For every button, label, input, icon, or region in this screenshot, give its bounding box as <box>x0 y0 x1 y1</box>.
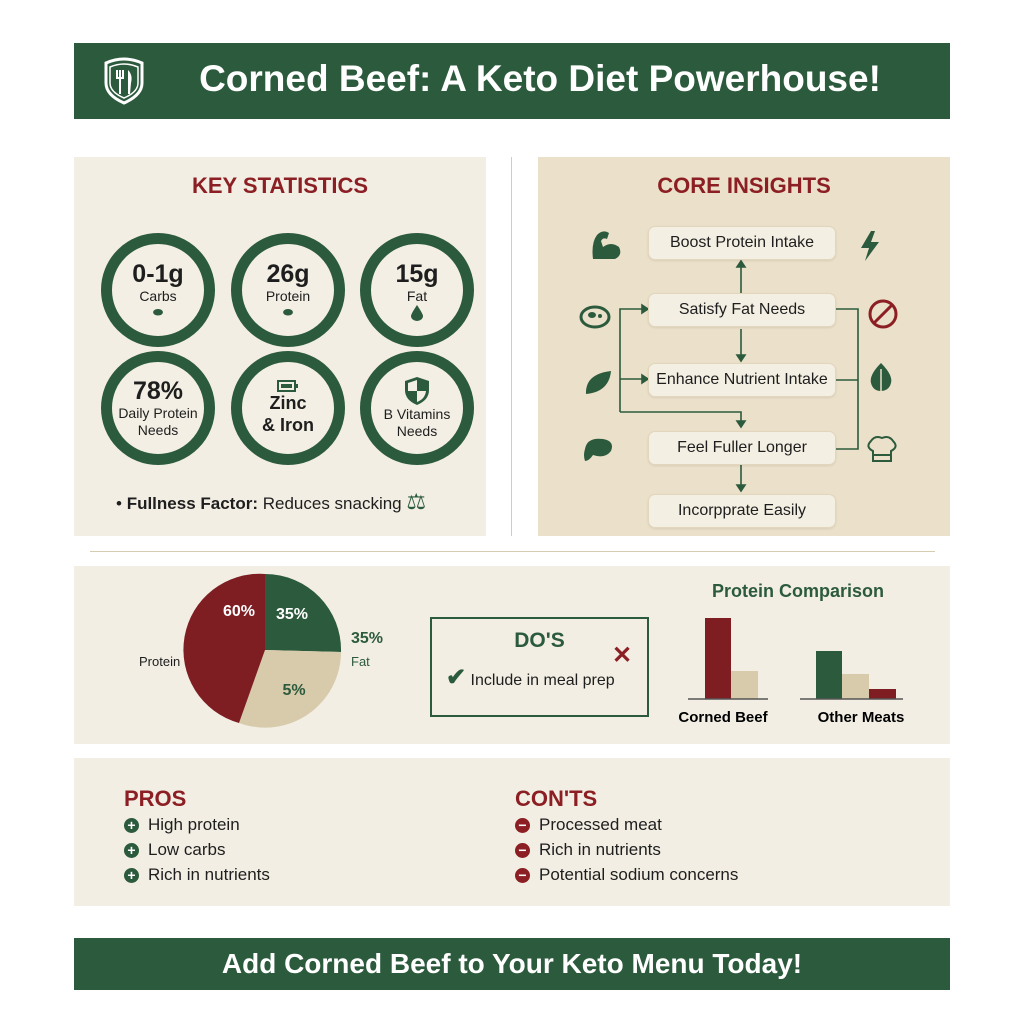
stat: daily protein: 78% <box>133 377 183 405</box>
cons list: − <box>518 842 527 858</box>
insight: satisfy fat <box>648 293 836 327</box>
pros list: + <box>127 866 136 882</box>
cons list <box>515 786 738 884</box>
pros list: Rich in nutrients <box>148 865 270 884</box>
stat: carbs <box>101 233 215 347</box>
insight: incorporate <box>648 494 836 528</box>
stat: carbs: Carbs <box>139 288 177 304</box>
pros list: PROS <box>124 786 186 811</box>
stat: daily protein <box>101 351 215 465</box>
pros list <box>124 786 270 884</box>
pie chart <box>139 574 383 728</box>
do's box: DO'S <box>514 629 565 652</box>
insight: satisfy fat: Satisfy Fat Needs <box>679 301 805 318</box>
insight: boost protein: Boost Protein Intake <box>670 234 814 251</box>
icons: core insights <box>580 231 898 462</box>
pie chart: 60% <box>223 603 255 620</box>
pie chart: Protein <box>139 654 180 669</box>
cons list: − <box>518 866 527 882</box>
pros list: High protein <box>148 815 240 834</box>
flow connectors <box>619 260 859 492</box>
footer call to action: Add Corned Beef to Your Keto Menu Today! <box>222 948 802 979</box>
fullness factor note: • Fullness Factor: Reduces snacking ⚖ <box>116 489 426 514</box>
do's box: ✔ Include in meal prep <box>446 664 615 691</box>
stat: protein: Protein <box>266 288 310 304</box>
heading: core insights: CORE INSIGHTS <box>657 173 831 198</box>
pie chart: 35% <box>276 606 308 623</box>
stat: b vitamins: Needs <box>397 423 437 439</box>
pie chart: Fat <box>351 654 370 669</box>
stat: protein <box>231 233 345 347</box>
icon: shield with fork and knife <box>104 58 144 105</box>
heading: key statistics: KEY STATISTICS <box>192 173 368 198</box>
cons list: − <box>518 816 527 832</box>
header banner <box>74 43 950 119</box>
insight: enhance nutrient <box>648 363 836 397</box>
stat: protein: 26g <box>266 260 310 288</box>
pros list: Low carbs <box>148 840 225 859</box>
insight: feel fuller <box>648 431 836 465</box>
insight: feel fuller: Feel Fuller Longer <box>677 439 807 456</box>
bar chart: protein comparison: Corned Beef <box>678 709 769 726</box>
stat: b vitamins <box>360 351 474 465</box>
cons list: Potential sodium concerns <box>539 865 738 884</box>
pros list: + <box>127 816 136 832</box>
cons list: CON'TS <box>515 786 597 811</box>
bar chart: protein comparison: Protein Comparison <box>712 581 884 601</box>
insight: enhance nutrient: Enhance Nutrient Intake <box>656 371 828 388</box>
stat: b vitamins: B Vitamins <box>384 406 450 422</box>
panel: key statistics <box>74 157 486 536</box>
panel: macro chart and comparison <box>74 566 950 744</box>
stat: daily protein: Needs <box>138 422 178 438</box>
stat: fat: Fat <box>407 288 427 304</box>
cons list: Rich in nutrients <box>539 840 661 859</box>
stat: carbs: ⬬ <box>153 305 163 319</box>
insight: incorporate: Incorpprate Easily <box>678 502 806 519</box>
title: Corned Beef: A Keto Diet Powerhouse! <box>199 58 881 99</box>
panel: core insights <box>538 157 950 536</box>
cons list: Processed meat <box>539 815 662 834</box>
stat: zinc iron: & Iron <box>262 415 314 435</box>
pie chart: 35% <box>351 630 383 647</box>
stat: daily protein: Daily Protein <box>118 405 198 421</box>
stat: carbs: 0-1g <box>132 260 184 288</box>
pie chart: 5% <box>282 682 306 699</box>
pros list: + <box>127 842 136 858</box>
do's box: ✕ <box>612 642 632 669</box>
do's box <box>430 617 649 717</box>
stat: zinc iron <box>231 351 345 465</box>
bar chart: protein comparison <box>678 581 904 726</box>
stat: fat: 15g <box>395 260 439 288</box>
stat: zinc iron: Zinc <box>269 393 306 413</box>
insight: boost protein <box>648 226 836 260</box>
bar chart: protein comparison: Other Meats <box>818 709 904 726</box>
footer call to action <box>74 938 950 990</box>
stat: fat <box>360 233 474 347</box>
stat: protein: ⬬ <box>283 305 293 319</box>
panel: pros and cons <box>74 758 950 906</box>
